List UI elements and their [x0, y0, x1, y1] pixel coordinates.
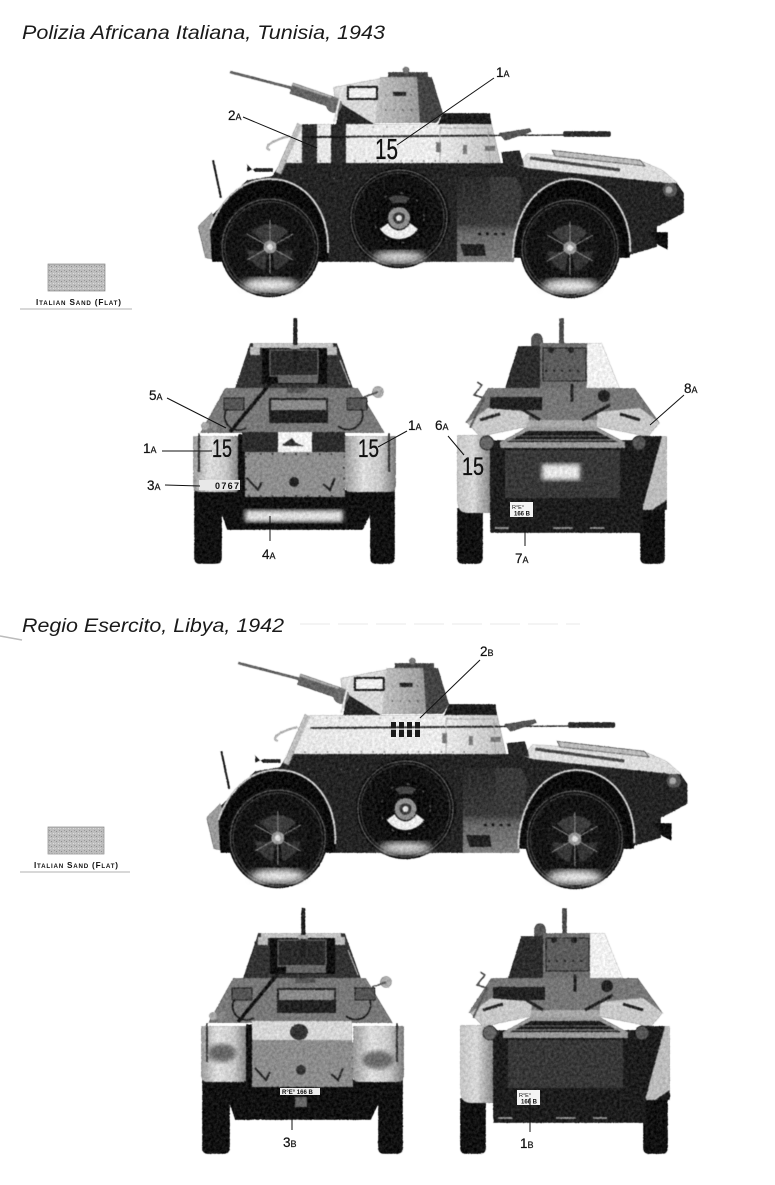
label 6A: [435, 418, 464, 455]
legend: Italian Sand top: [20, 264, 132, 309]
vehicle number 15: 15: [375, 134, 398, 166]
label 7A: 7A: [515, 551, 529, 566]
label 3B: [283, 1096, 297, 1150]
label 1A side: 1A: [496, 65, 510, 80]
label 8A: 8A: [684, 381, 698, 396]
label 5A: 5A: [149, 388, 163, 403]
rear plate: 166 B: [521, 1100, 538, 1106]
vehicle: rear view Polizia Africana Italiana: [457, 318, 667, 564]
label 1A front left: [143, 441, 212, 456]
label 4A: 4A: [262, 547, 276, 562]
rear plate: R°E°: [519, 1093, 531, 1099]
vehicle: side view Polizia Africana Italiana: [198, 66, 684, 298]
label 1A front right: [378, 418, 422, 447]
label 6A: 6A: [435, 418, 449, 433]
label 1A front right: 1A: [408, 418, 422, 433]
title: Regio Esercito: Regio Esercito, Libya, 1942: [22, 615, 284, 637]
label 1A side: [397, 65, 510, 145]
label 2A side: 2A: [228, 108, 242, 123]
tally marks: [391, 722, 420, 737]
label 3A: 3A: [147, 478, 161, 493]
rear plate: R°E°: [512, 505, 524, 511]
scan mark: [0, 624, 580, 640]
vehicle: side view Regio Esercito: [207, 658, 688, 890]
label 3A: [147, 478, 200, 493]
number plate 0767: [199, 480, 240, 491]
label 8A: [650, 381, 698, 425]
label 7A: [515, 525, 529, 566]
number plate 0767: 0767: [215, 481, 239, 491]
vehicle: front view Regio Esercito: [201, 908, 404, 1154]
rear plate: [510, 502, 533, 518]
number 15 rear fender: 15: [462, 453, 484, 481]
label 2A side: [228, 108, 317, 148]
title: Polizia Africana Italiana: Polizia Africana Italiana, Tunisia, 1943: [22, 22, 385, 44]
rear plate: 166 B: [514, 512, 531, 518]
front plate: [280, 1088, 320, 1096]
rear plate: [517, 1090, 540, 1106]
label 2B: 2B: [480, 644, 494, 659]
label 2B: [420, 644, 494, 718]
number 15 left fender: 15: [212, 435, 232, 463]
legend: Italian Sand bottom: [20, 827, 130, 872]
legend: Italian Sand top: ITALIAN SAND (FLAT): [36, 298, 121, 307]
label 4A: [262, 516, 276, 562]
label 1A front left: 1A: [143, 441, 157, 456]
vehicle: front view Polizia Africana Italiana: [193, 318, 396, 564]
label 1B: [520, 1098, 534, 1151]
number 15 right fender: 15: [358, 435, 379, 463]
label 5A: [149, 388, 226, 428]
front plate: R°E° 166 B: [282, 1090, 313, 1096]
label 1B: 1B: [520, 1136, 534, 1151]
label 3B: 3B: [283, 1135, 297, 1150]
legend: Italian Sand bottom: ITALIAN SAND (FLAT): [34, 861, 118, 870]
vehicle: rear view Regio Esercito: [460, 908, 670, 1154]
